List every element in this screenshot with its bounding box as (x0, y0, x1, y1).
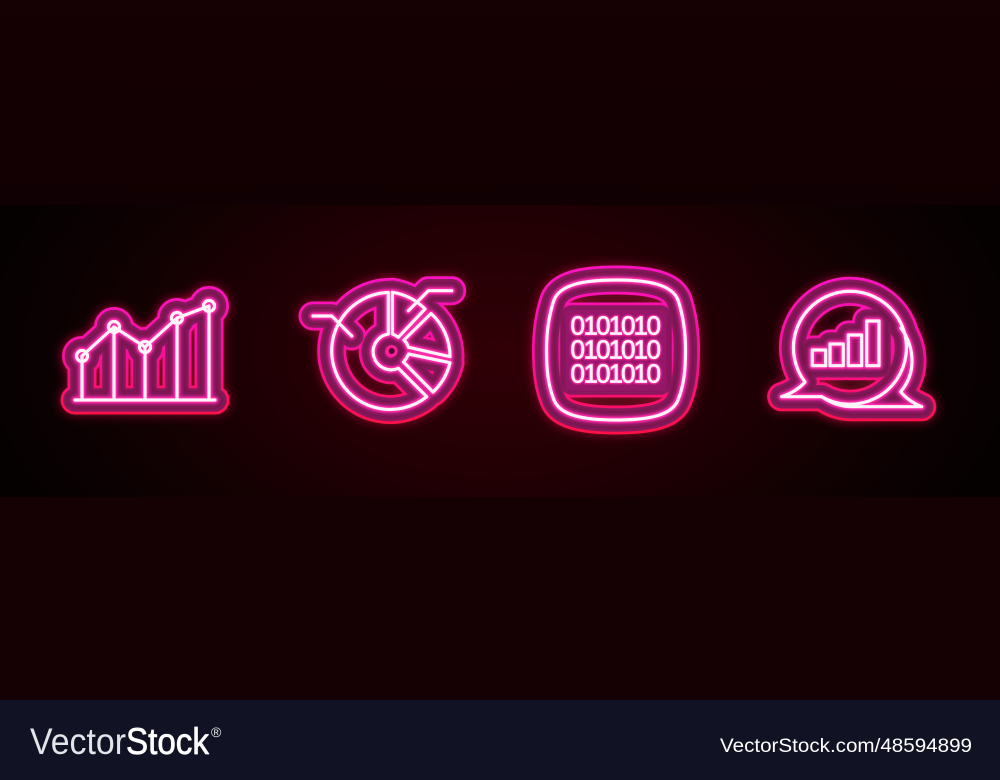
binary digits: 0101010 (570, 334, 661, 364)
binary panel fill (564, 308, 668, 392)
icon: binary code chip (546, 280, 686, 420)
icon: speech bubbles with signal bars (782, 291, 922, 407)
binary digits glow: 0101010 (570, 310, 661, 340)
binary digits: 0101010 (570, 358, 661, 388)
footer logo: Vector (30, 721, 126, 762)
registered mark: ® (211, 724, 222, 740)
footer image id: VectorStock.com/48594899 (720, 735, 972, 757)
footer logo: Stock (126, 721, 209, 762)
footer logo (30, 721, 209, 762)
footer bar (0, 700, 1000, 780)
background: lower dark band (0, 497, 1000, 700)
background: central glow band (0, 205, 1000, 497)
pie centre dot (387, 346, 396, 356)
binary digits glow (570, 310, 661, 388)
binary digits: 0101010 (570, 310, 661, 340)
binary digits glow: 0101010 (570, 358, 661, 388)
background: upper dark band (0, 0, 1000, 205)
icon: line and bar growth chart (75, 300, 215, 400)
binary digits (570, 310, 661, 388)
binary digits glow: 0101010 (570, 334, 661, 364)
icon: pie chart with trend line (313, 291, 452, 409)
